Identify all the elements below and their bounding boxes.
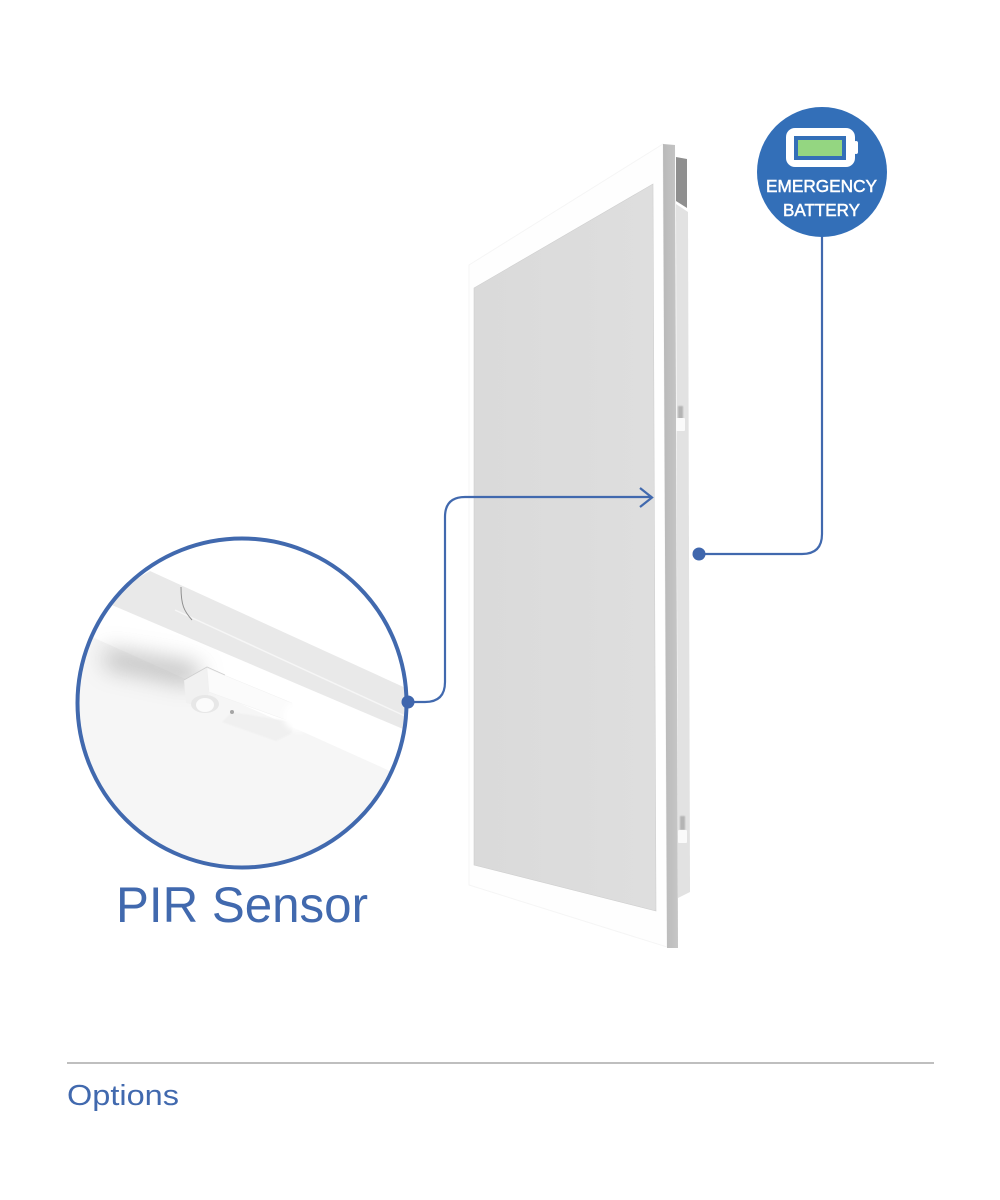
- badge label: BATTERY: [783, 200, 860, 220]
- PIR sensor magnifier: [70, 530, 420, 880]
- white front frame: [469, 144, 667, 947]
- lower spring clip: [678, 816, 687, 843]
- magnified sensor image: [80, 571, 404, 866]
- arrow: sensor to panel: [402, 488, 652, 708]
- badge circle: [757, 107, 887, 237]
- light diffuser: [474, 184, 656, 911]
- magnifier ring: [78, 538, 406, 868]
- lower surface: [80, 638, 390, 866]
- heading: PIR Sensor: PIR Sensor: [116, 877, 368, 933]
- grey housing band: [100, 571, 410, 732]
- side edge of frame: [663, 144, 678, 948]
- connector: battery to panel: [692, 236, 822, 560]
- sensor body: [184, 667, 292, 722]
- panel rear housing: [676, 204, 690, 898]
- divider line: [67, 1062, 934, 1064]
- band groove lines: [175, 610, 405, 716]
- badge: emergency battery: [757, 107, 887, 237]
- LED panel product: [469, 144, 690, 948]
- upper spring clip: [676, 406, 685, 431]
- bright highlight: [286, 708, 293, 728]
- footer label: Options: Options: [67, 1080, 179, 1112]
- icon: battery: [786, 128, 858, 167]
- sensor base shadow: [276, 720, 285, 724]
- shadow beside sensor: [105, 648, 205, 686]
- connector dot: panel: [692, 548, 706, 560]
- badge label: [766, 176, 877, 220]
- badge label: EMERGENCY: [766, 176, 877, 196]
- connector dot: sensor: [402, 696, 414, 708]
- PIR lens dome: [191, 695, 219, 713]
- dark mounting bracket: [676, 157, 687, 208]
- curved seam: [181, 587, 192, 620]
- indicator dot: [230, 710, 234, 714]
